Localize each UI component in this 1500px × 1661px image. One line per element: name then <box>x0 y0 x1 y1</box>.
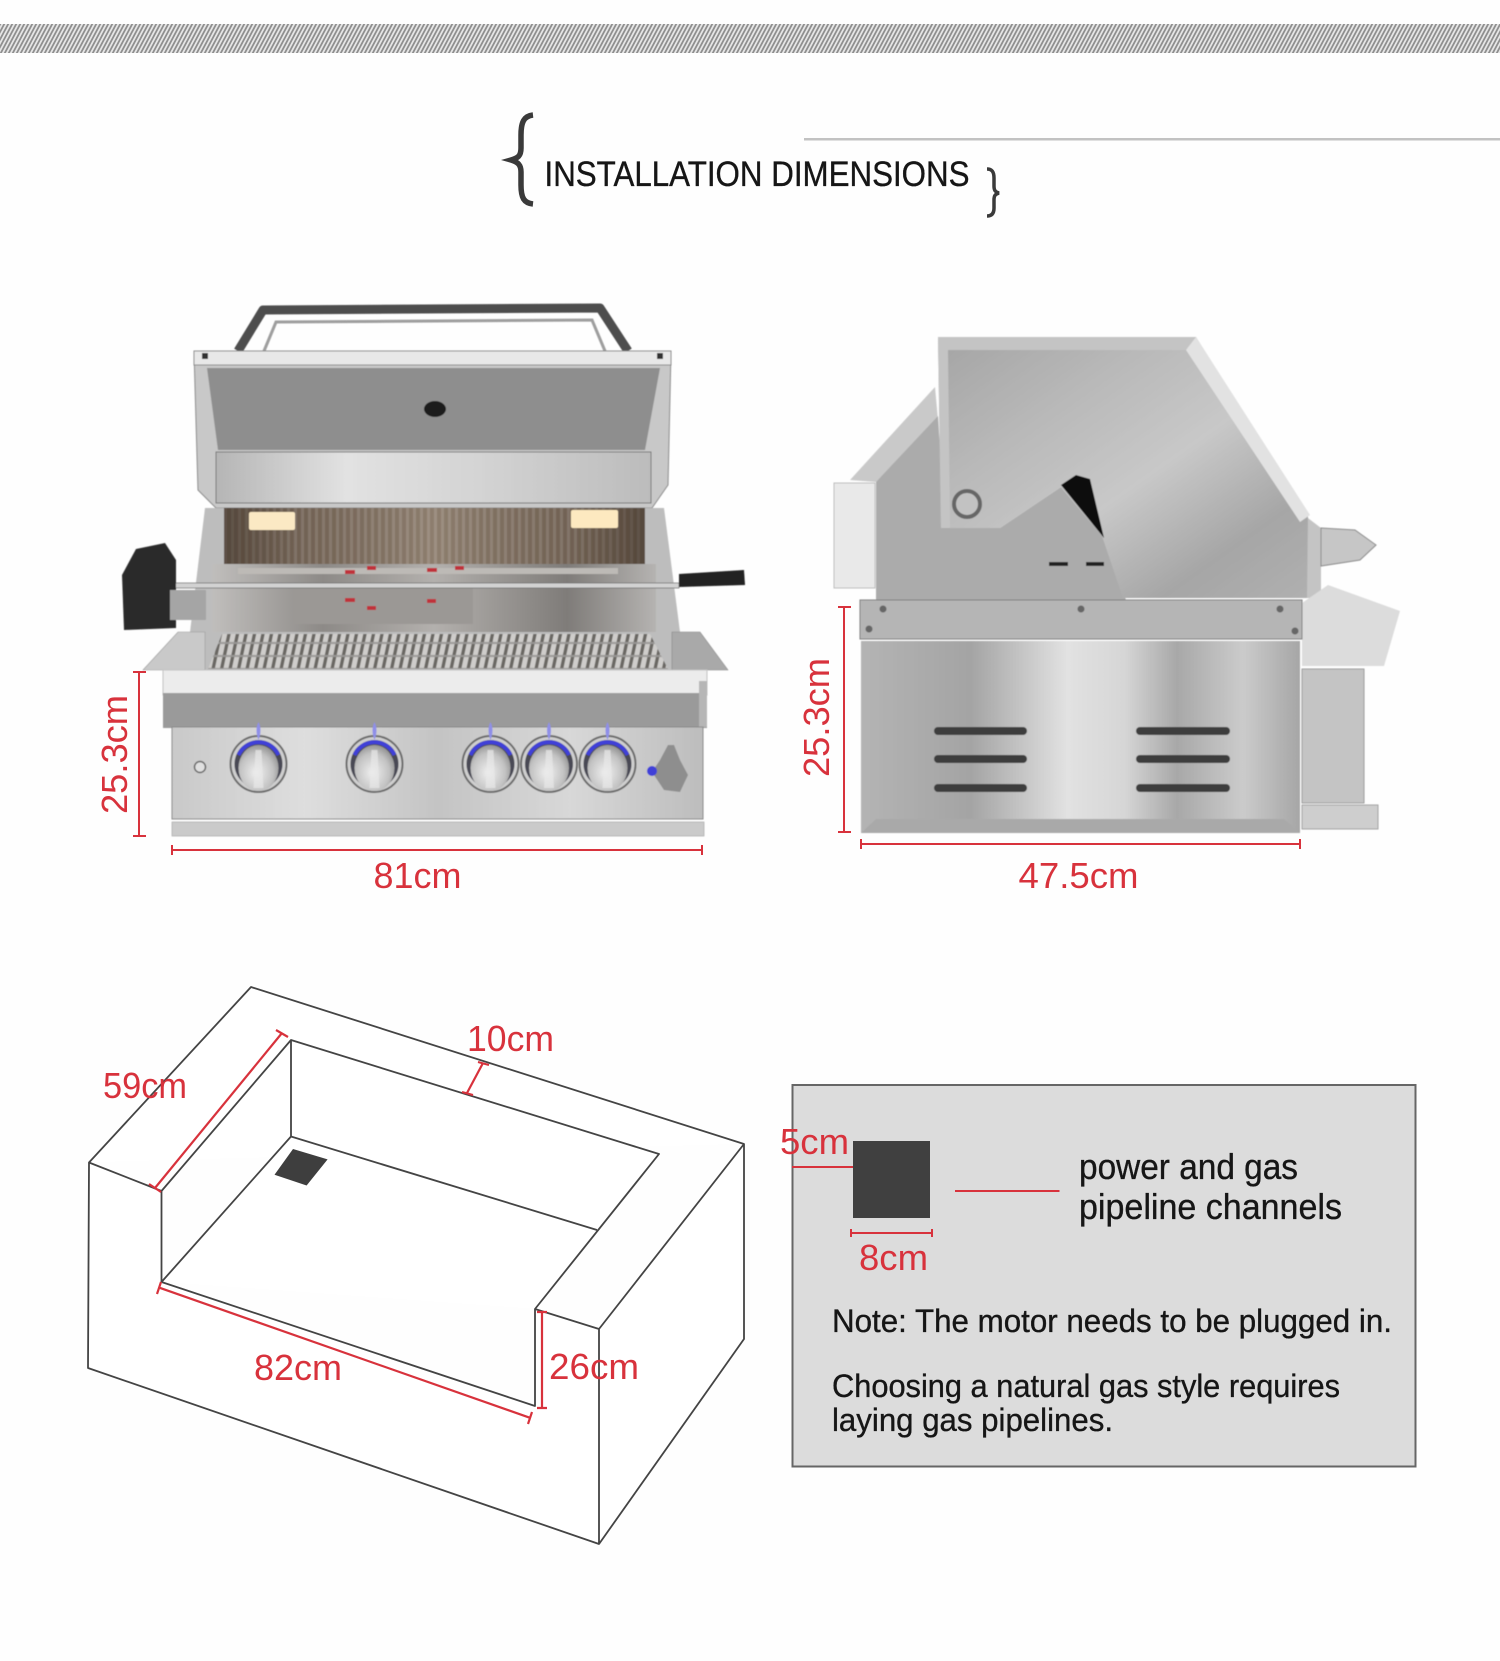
cabinet cutout diagram <box>88 987 744 1544</box>
frame corner screws <box>202 353 663 359</box>
right vent slots <box>1136 727 1230 792</box>
left brace <box>511 115 533 204</box>
dimension 26cm <box>537 1312 639 1408</box>
5cm offset dimension: 5cm <box>780 1121 849 1162</box>
firebox sides <box>190 508 680 632</box>
height dimension 25.3cm <box>94 672 146 836</box>
lid handle inner highlight <box>264 320 605 351</box>
warm light overlay <box>224 508 645 564</box>
side view of grill with dimensions <box>796 337 1400 896</box>
halogen lights <box>249 512 295 530</box>
lower front box <box>1302 669 1364 803</box>
side body <box>876 416 1126 600</box>
dimension 26cm: 26cm <box>549 1346 639 1387</box>
natural gas note <box>832 1368 1340 1438</box>
natural gas note: laying gas pipelines. <box>832 1402 1113 1438</box>
grate base <box>200 632 680 672</box>
title: installation dimensions <box>511 115 1500 216</box>
rotisserie handle <box>679 570 745 587</box>
rear box <box>834 483 875 588</box>
side slots <box>1049 562 1104 566</box>
foot <box>1302 805 1378 829</box>
cabinet wireframe <box>88 987 744 1544</box>
channel label: pipeline channels <box>1079 1186 1342 1227</box>
lid handle outer tube <box>238 308 628 351</box>
control panel bottom strip <box>172 822 704 836</box>
right brace <box>987 169 999 216</box>
rotisserie motor <box>122 543 176 630</box>
height dimension 25.3cm: 25.3cm <box>94 695 135 814</box>
top band <box>860 600 1302 639</box>
knob three <box>462 722 518 792</box>
hinge bolt <box>954 491 980 517</box>
depth dimension 47.5cm: 47.5cm <box>1018 855 1138 896</box>
front grill photo <box>122 308 745 836</box>
dimension 59cm <box>103 1030 288 1192</box>
panel box <box>792 1085 1416 1466</box>
front view of grill with dimensions <box>94 308 745 896</box>
side grill photo <box>834 337 1400 833</box>
side shelves <box>143 632 205 670</box>
knob two <box>346 722 402 792</box>
bottle opener <box>652 745 688 792</box>
natural gas note: Choosing a natural gas style requires <box>832 1368 1340 1404</box>
cooking grate <box>208 634 668 669</box>
lid vent <box>424 401 446 417</box>
hatched top band <box>0 24 1500 53</box>
pipe opening <box>274 1149 328 1186</box>
front shelf <box>1302 585 1400 666</box>
lid front lip <box>1300 512 1321 598</box>
height dimension 25.3cm: 25.3cm <box>796 658 837 777</box>
band screws <box>866 606 1298 634</box>
panel bevel <box>861 819 1300 833</box>
control panel top <box>163 670 707 695</box>
dimension 82cm <box>157 1282 532 1424</box>
small indicator <box>194 762 206 772</box>
dimension 10cm <box>462 1018 554 1095</box>
knob one <box>230 722 286 792</box>
lid front edge <box>1186 337 1310 522</box>
lid top edge <box>938 337 1203 528</box>
depth dimension 47.5cm <box>861 839 1300 896</box>
channel label: power and gas <box>1079 1146 1298 1187</box>
knob five <box>580 722 636 792</box>
8cm width dimension: 8cm <box>859 1237 928 1278</box>
dimension 59cm: 59cm <box>103 1065 187 1106</box>
firebox back lower <box>212 564 656 634</box>
leader line <box>955 1190 1060 1192</box>
width dimension 81cm: 81cm <box>374 855 462 896</box>
title rule <box>804 138 1500 140</box>
lid side plate <box>938 337 1308 598</box>
lid bright strip <box>216 452 651 503</box>
channel label <box>1079 1146 1342 1227</box>
rotisserie rod <box>174 583 679 588</box>
width dimension 81cm <box>172 845 702 896</box>
lid hole <box>1061 475 1104 538</box>
rotisserie basket <box>293 588 473 624</box>
left vent slots <box>934 727 1027 792</box>
height dimension 25.3cm <box>796 607 851 832</box>
side knob <box>1321 528 1376 566</box>
dimension 10cm: 10cm <box>467 1018 554 1059</box>
lid side flanges <box>194 351 671 508</box>
lid frame top <box>194 351 671 365</box>
motor note: Note: The motor needs to be plugged in. <box>832 1303 1392 1339</box>
dimension 82cm: 82cm <box>254 1347 342 1388</box>
red spots <box>345 566 464 610</box>
control panel front <box>172 727 703 819</box>
knob four <box>521 722 577 792</box>
rear wedge <box>850 387 938 482</box>
title text: INSTALLATION DIMENSIONS <box>544 155 970 194</box>
lid inner panel <box>207 368 660 450</box>
opener blue light <box>647 766 657 776</box>
panel: power and gas pipeline note <box>780 1085 1416 1466</box>
lower panel <box>861 641 1300 833</box>
firebox back upper <box>224 508 645 564</box>
pipeline channel square <box>853 1141 930 1218</box>
